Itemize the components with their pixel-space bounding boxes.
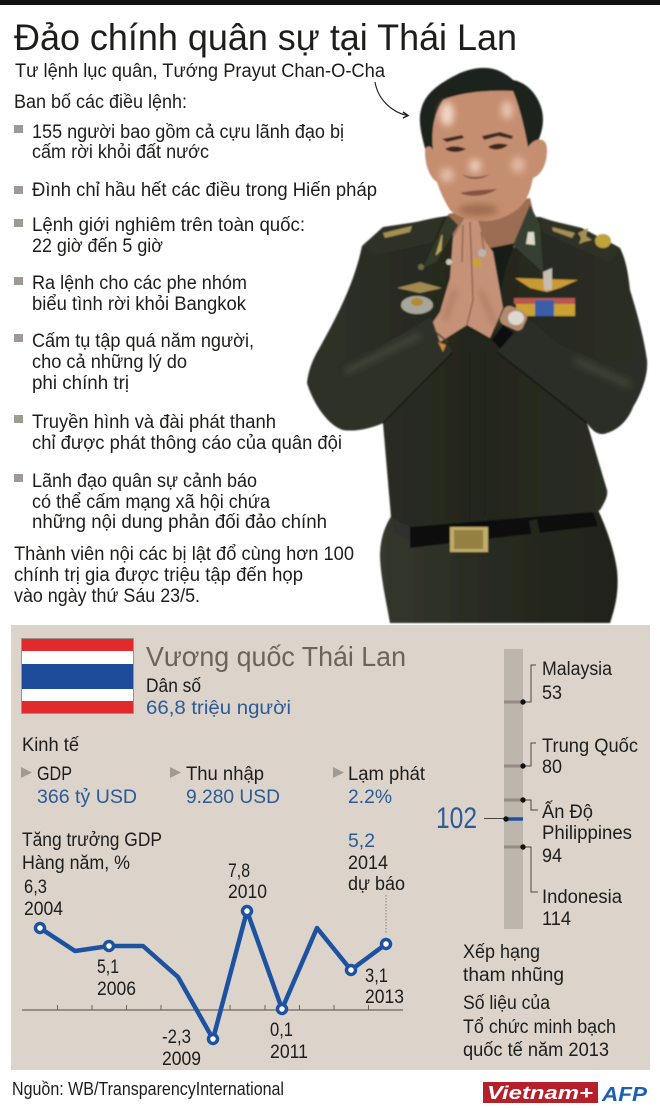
decree 1: cấm rời khỏi đất nước	[32, 142, 209, 163]
Thailand rank: 102	[436, 802, 477, 835]
rank: China: 80	[542, 757, 562, 778]
corruption ranking scale	[436, 649, 638, 930]
data label 2011: 0,1	[270, 1020, 293, 1041]
data label 2013: 2013	[365, 987, 404, 1008]
population: 66,8 triệu người	[146, 698, 291, 719]
stat: GDP	[21, 764, 137, 808]
hair	[420, 68, 543, 155]
subtitle: Tư lệnh lục quân, Tướng Prayut Chan-O-Cha	[15, 61, 385, 82]
stat: inflation: Lạm phát	[348, 764, 426, 785]
logo: Vietnam+	[483, 1082, 598, 1103]
belt and buckle	[392, 512, 598, 552]
closing note: chính trị gia được triệu tập đến họp	[14, 565, 303, 586]
decree 7: có thể cấm mạng xã hội chứa	[32, 492, 270, 513]
decree 1: 155 người bao gồm cả cựu lãnh đạo bị	[32, 122, 344, 143]
population: Dân số	[146, 676, 201, 697]
closing note	[14, 544, 354, 607]
rank: Malaysia: 53	[542, 683, 562, 704]
stat: income: Thu nhập	[186, 764, 264, 785]
scale caption	[463, 942, 616, 1061]
decree 4: Ra lệnh cho các phe nhóm	[32, 273, 247, 294]
chart heading: Tăng trưởng GDP	[22, 830, 162, 851]
data label 2004: 2004	[24, 899, 63, 920]
data label 2010: 2010	[228, 882, 267, 903]
decree 7: những nội dung phản đối đảo chính	[32, 512, 327, 533]
shoulder boards and collar	[363, 205, 620, 272]
rank: Indonesia	[542, 887, 622, 930]
decree 5: cho cả những lý do	[32, 352, 187, 373]
decree 3: Lệnh giới nghiêm trên toàn quốc:	[32, 215, 305, 236]
data label 2004	[24, 877, 63, 920]
logo: AFP: AFP	[601, 1084, 648, 1106]
decree 3	[14, 215, 305, 257]
decree 7: Lãnh đạo quân sự cảnh báo	[32, 471, 257, 492]
data label 2014 forecast: dự báo	[348, 874, 405, 895]
arrow: to portrait	[375, 82, 408, 118]
data label 2009: 2009	[162, 1049, 201, 1070]
data label 2006: 5,1	[97, 957, 119, 978]
data label 2006: 2006	[97, 979, 136, 1000]
scale caption: Tổ chức minh bạch	[463, 1017, 616, 1038]
data label 2011	[270, 1020, 308, 1063]
data label 2004: 6,3	[24, 877, 47, 898]
decree 5: Cấm tụ tập quá năm người,	[32, 331, 254, 352]
decree 6	[14, 412, 342, 454]
hands	[433, 217, 529, 352]
data label 2010	[228, 861, 267, 903]
logo: Vietnam+: Vietnam+	[487, 1083, 594, 1103]
rank: Malaysia: Malaysia	[542, 659, 612, 680]
decree 2: Đình chỉ hầu hết các điều trong Hiến pháp	[32, 180, 377, 201]
source: Nguồn: WB/TransparencyInternational	[12, 1079, 284, 1099]
data label 2013	[365, 966, 404, 1008]
data label 2014 forecast	[348, 831, 405, 895]
heading: country name: Vương quốc Thái Lan	[146, 641, 406, 672]
scale caption: tham nhũng	[463, 965, 564, 986]
scale caption: Xếp hạng	[463, 942, 540, 963]
portrait: general in uniform	[307, 68, 647, 623]
decree 4	[14, 273, 247, 315]
scale caption: Số liệu của	[463, 993, 550, 1014]
stat: inflation: 2.2%	[348, 787, 392, 808]
population	[146, 676, 291, 719]
panel: Thailand facts	[11, 625, 650, 1070]
intro line: Ban bố các điều lệnh:	[14, 92, 187, 113]
rank: Indonesia: Indonesia	[542, 887, 622, 908]
rank: India and Philippines: Philippines	[542, 823, 632, 844]
stat: GDP: GDP	[37, 764, 72, 785]
data label 2006	[97, 957, 136, 1000]
stat: income: 9.280 USD	[186, 787, 280, 808]
data label 2011: 2011	[270, 1042, 308, 1063]
rank: India and Philippines	[542, 801, 632, 867]
data label 2013: 3,1	[365, 966, 388, 987]
stat: inflation	[333, 764, 426, 808]
decree 7	[14, 471, 327, 533]
scale caption: quốc tế năm 2013	[463, 1040, 609, 1061]
decree 4: biểu tình rời khỏi Bangkok	[32, 294, 246, 315]
decree 6: chỉ được phát thông cáo của quân đội	[32, 433, 342, 454]
decree 5	[14, 331, 254, 394]
chart heading: Hàng năm, %	[22, 853, 130, 874]
decree 6: Truyền hình và đài phát thanh	[32, 412, 276, 433]
economy label: Kinh tế	[22, 735, 79, 756]
top bar	[0, 0, 660, 5]
stat: GDP: 366 tỷ USD	[37, 787, 137, 808]
list of decrees	[14, 122, 377, 533]
closing note: Thành viên nội các bị lật đổ cùng hơn 100	[14, 544, 354, 565]
rank: Malaysia	[542, 659, 612, 704]
rank: Indonesia: 114	[542, 909, 571, 930]
data label 2014 forecast: 2014	[348, 853, 388, 874]
rank: China: Trung Quốc	[542, 736, 638, 757]
decree 1	[14, 122, 344, 163]
rank: China	[542, 736, 638, 778]
stat: income	[170, 764, 280, 808]
decree 3: 22 giờ đến 5 giờ	[32, 236, 163, 257]
face	[425, 91, 547, 221]
data label 2014 forecast: 5,2	[348, 831, 375, 852]
data label 2010: 7,8	[228, 861, 250, 882]
line chart: GDP growth	[22, 831, 405, 1070]
rank: India and Philippines: 94	[542, 846, 562, 867]
decree 5: phi chính trị	[32, 373, 129, 394]
icon: Thai flag	[22, 638, 134, 714]
closing note: vào ngày thứ Sáu 23/5.	[14, 586, 200, 607]
data label 2009: -2,3	[162, 1027, 191, 1048]
rank: India and Philippines: Ấn Độ	[542, 801, 593, 823]
title: Đảo chính quân sự tại Thái Lan	[14, 17, 517, 58]
data label 2009	[162, 1027, 201, 1070]
chart heading	[22, 830, 162, 874]
badges and ribbons	[397, 268, 578, 316]
